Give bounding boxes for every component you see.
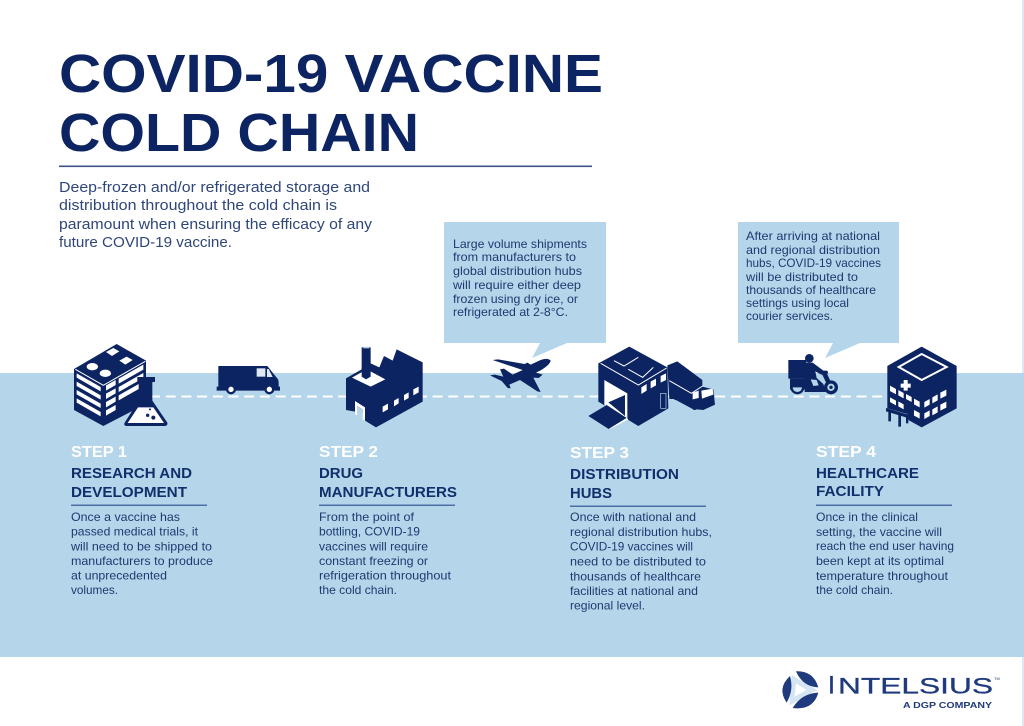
icon: airplane [490, 359, 551, 392]
panel: step 1: will need to be shipped to [70, 539, 212, 553]
panel: step 1: at unprecedented [71, 568, 167, 582]
panel: step 2 [319, 444, 457, 597]
panel: step 2: bottling, COVID-19 [319, 525, 420, 539]
panel: step 4: STEP 4 [816, 444, 876, 461]
callout: shipments: will require either deep [452, 278, 581, 292]
panel: step 2: MANUFACTURERS [319, 485, 457, 501]
callout: courier distribution: hubs, COVID-19 vaccines [746, 256, 881, 270]
callout: courier distribution: thousands of healthcare [746, 283, 876, 297]
callout: courier distribution [738, 222, 899, 358]
panel: step 4: setting, the vaccine will [816, 525, 942, 539]
logo: Intelsius: TM [994, 676, 1000, 681]
panel: step 2: STEP 2 [319, 444, 378, 461]
logo: Intelsius [782, 671, 1000, 710]
intro text [59, 179, 373, 251]
panel: step 2: vaccines will require [319, 539, 428, 553]
panel: step 2: refrigeration throughout [319, 568, 452, 582]
icon: van [217, 366, 280, 394]
intro text: future COVID-19 vaccine. [59, 234, 232, 251]
intro text: distribution throughout the cold chain is [59, 197, 337, 214]
icon: courier motorbike [788, 354, 838, 394]
callout: shipments: frozen using dry ice, or [453, 292, 578, 306]
panel: step 1: Once a vaccine has [71, 510, 180, 524]
icon: hospital [886, 347, 957, 427]
panel: step 4: FACILITY [816, 484, 884, 500]
icon: factory [346, 347, 423, 427]
panel: step 1: RESEARCH AND [71, 466, 192, 482]
logo: Intelsius: I [828, 672, 835, 700]
callout: shipments: global distribution hubs [453, 264, 582, 278]
icon: research building and flask [74, 344, 167, 426]
callout: courier distribution: courier services. [746, 309, 833, 323]
callout: shipments: Large volume shipments [453, 237, 587, 251]
panel: step 1 [70, 444, 213, 597]
callout: courier distribution: After arriving at national [746, 229, 880, 243]
panel: step 3: need to be distributed to [570, 555, 706, 569]
callout: shipments: refrigerated at 2-8°C. [453, 305, 568, 319]
panel: step 4: reach the end user having [816, 539, 954, 553]
panel: step 4: been kept at its optimal [816, 554, 944, 568]
panel: step 3: DISTRIBUTION [570, 467, 679, 483]
panel: step 1: STEP 1 [71, 444, 127, 461]
panel: step 1: manufacturers to produce [71, 554, 213, 568]
panel: step 3: regional level. [570, 599, 645, 613]
callout: shipments [444, 222, 606, 358]
panel: step 3: HUBS [570, 486, 612, 502]
panel: step 4: temperature throughout [816, 569, 949, 583]
callout: courier distribution: settings using local [746, 296, 849, 310]
panel: step 4: Once in the clinical [816, 510, 918, 524]
callout: shipments: from manufacturers to [453, 250, 576, 264]
panel: step 2: the cold chain. [319, 583, 397, 597]
panel: step 3: regional distribution hubs, [570, 525, 712, 539]
panel: step 4: the cold chain. [816, 583, 893, 597]
logo: Intelsius: NTELSIUS [838, 674, 993, 698]
blue band background [0, 373, 1024, 657]
callout: courier distribution: will be distributed to [745, 270, 858, 284]
panel: step 3: STEP 3 [570, 445, 629, 462]
intro text: Deep-frozen and/or refrigerated storage and [59, 179, 370, 196]
callout: courier distribution: and regional distribution [746, 243, 880, 257]
panel: step 3 [570, 445, 712, 613]
intro text: paramount when ensuring the efficacy of any [59, 216, 373, 233]
logo: Intelsius: A DGP COMPANY [903, 700, 992, 710]
panel: step 3: facilities at national and [570, 584, 698, 598]
icon: distribution hub and truck [588, 347, 715, 429]
title: COVID-19 VACCINE [59, 44, 603, 104]
panel: step 2: constant freezing or [319, 554, 428, 568]
panel: step 3: COVID-19 vaccines will [570, 540, 693, 554]
panel: step 2: From the point of [319, 510, 415, 524]
panel: step 4: HEALTHCARE [816, 466, 919, 482]
panel: step 1: volumes. [71, 583, 118, 597]
panel: step 1: passed medical trials, it [71, 525, 199, 539]
panel: step 3: Once with national and [570, 510, 696, 524]
title: COLD CHAIN [59, 103, 419, 163]
panel: step 2: DRUG [319, 466, 363, 482]
panel: step 3: thousands of healthcare [570, 569, 701, 583]
title [59, 44, 603, 163]
panel: step 1: DEVELOPMENT [71, 485, 187, 501]
panel: step 4 [816, 444, 954, 597]
